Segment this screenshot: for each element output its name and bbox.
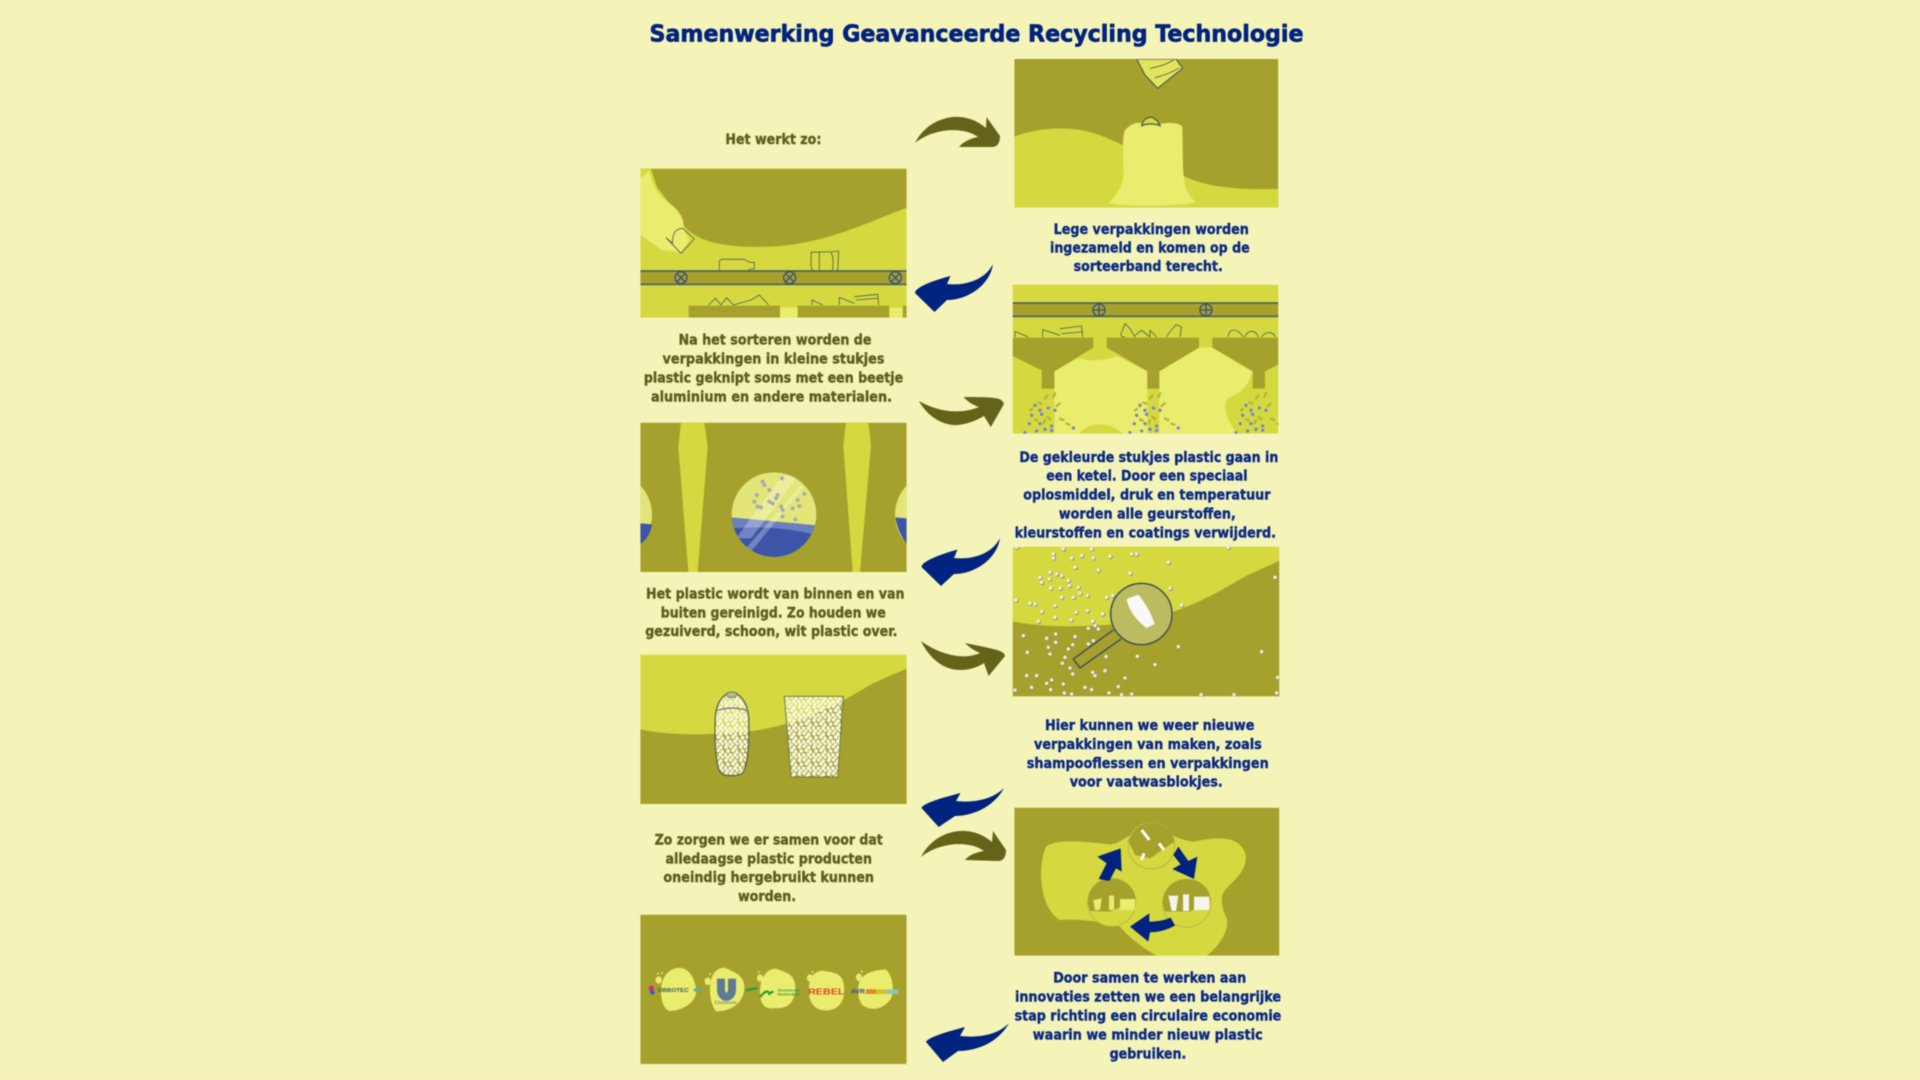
wheels bbox=[1093, 304, 1212, 316]
arrow: navy 2 bbox=[922, 538, 1000, 586]
text: step 4: Het plastic wordt van binnen en van bbox=[646, 586, 904, 602]
text: step 1: Lege verpakkingen worden bbox=[1054, 222, 1249, 238]
text: step 5: voor vaatwasblokjes. bbox=[1070, 775, 1223, 791]
light background shapes bbox=[1054, 348, 1253, 434]
text: step 5: verpakkingen van maken, zoals bbox=[1034, 737, 1262, 753]
bag bbox=[811, 251, 839, 271]
arrow: navy 4 bbox=[926, 1023, 1009, 1062]
magnifier lens bbox=[1111, 583, 1172, 645]
text: step 3: kleurstoffen en coatings verwijderd. bbox=[1015, 525, 1276, 541]
text: step 7: gebruiken. bbox=[1110, 1047, 1186, 1063]
panel: sorting belt bbox=[640, 168, 907, 318]
package bag bbox=[784, 696, 843, 777]
panel: collecting sack bbox=[1014, 59, 1278, 208]
text: step 7: stap richting een circulaire economie bbox=[1015, 1009, 1281, 1025]
arrow: olive 4 bbox=[921, 831, 1006, 861]
logo: Unilever: Unilever bbox=[714, 1000, 737, 1006]
text: step 1: ingezameld en komen op de bbox=[1050, 241, 1250, 257]
logo: green partner bbox=[746, 987, 801, 997]
circle: flakes bbox=[1128, 822, 1175, 869]
intro label: Het werkt zo: bbox=[725, 132, 821, 148]
logo: AVR bbox=[851, 989, 898, 996]
magnified pellet bbox=[1127, 595, 1155, 628]
falling package bbox=[1137, 59, 1183, 88]
text: step 3: een ketel. Door een speciaal bbox=[1046, 469, 1248, 485]
arrow: left up bbox=[1097, 848, 1122, 881]
pellets bbox=[1015, 547, 1278, 695]
text: step 2 bbox=[644, 333, 903, 405]
title: Samenwerking Geavanceerde Recycling Technologie bbox=[650, 20, 1304, 48]
text: step 7 bbox=[1015, 971, 1281, 1063]
central vessel bbox=[729, 470, 819, 560]
logo: Obbotec bbox=[649, 986, 702, 995]
arrow: right down bbox=[1172, 847, 1197, 879]
magnifier handle bbox=[1073, 630, 1121, 668]
bottle label line bbox=[715, 708, 748, 711]
text: step 5: shampooflessen en verpakkingen bbox=[1027, 756, 1269, 772]
text: step 3: oplosmiddel, druk en temperatuur bbox=[1023, 488, 1271, 504]
logo: Obbotec: OBBOTEC bbox=[658, 988, 689, 994]
sack bbox=[1108, 123, 1196, 206]
circle: pellets bbox=[1088, 878, 1136, 926]
logo: green partner: Rotterdam bbox=[778, 992, 801, 997]
plastic flakes bbox=[1025, 393, 1284, 433]
arrow: navy 3 bbox=[922, 788, 1004, 827]
blob bbox=[1041, 828, 1246, 956]
text: step 2: plastic geknipt soms met een beetje bbox=[644, 371, 903, 387]
circle: products bbox=[1163, 879, 1211, 927]
text: step 2: Na het sorteren worden de bbox=[678, 333, 872, 349]
wheels bbox=[675, 272, 901, 284]
text: step 6 bbox=[655, 832, 883, 905]
logo: AVR: AVR bbox=[851, 990, 866, 996]
spikes bbox=[678, 423, 871, 572]
text: step 6: oneindig hergebruikt kunnen bbox=[663, 870, 874, 886]
arrow: olive 1 bbox=[915, 117, 1000, 147]
hoppers bbox=[1013, 338, 1278, 389]
text: step 5 bbox=[1027, 718, 1269, 791]
panel: new packaging bbox=[640, 655, 907, 804]
panel: recycling cycle bbox=[1014, 808, 1279, 956]
bottle on sack bbox=[1142, 117, 1160, 126]
conveyor belt bbox=[640, 271, 907, 284]
panel: shredding bbox=[1013, 285, 1284, 434]
text: step 4: gezuiverd, schoon, wit plastic over. bbox=[645, 624, 898, 640]
text: step 7: waarin we minder nieuw plastic bbox=[1033, 1028, 1263, 1044]
text: step 1 bbox=[1050, 222, 1250, 275]
arrow: bottom left bbox=[1130, 913, 1175, 942]
panel: partners bbox=[640, 915, 907, 1064]
logo: green partner: Gemeente bbox=[778, 987, 801, 992]
flakes bbox=[754, 478, 804, 519]
text: step 3 bbox=[1015, 450, 1278, 541]
logo: Unilever bbox=[714, 979, 737, 1006]
conveyor belt bbox=[1013, 303, 1278, 317]
side vessels bbox=[640, 486, 908, 544]
shampoo bottle bbox=[715, 692, 749, 776]
text: step 1: sorteerband terecht. bbox=[1074, 259, 1223, 275]
text: step 5: Hier kunnen we weer nieuwe bbox=[1045, 718, 1254, 734]
text: step 6: Zo zorgen we er samen voor dat bbox=[655, 832, 883, 848]
chute bbox=[640, 171, 689, 252]
bottle bbox=[719, 259, 754, 271]
arrow: olive 2 bbox=[919, 397, 1004, 427]
bins bbox=[689, 306, 907, 318]
package on chute bbox=[666, 228, 694, 253]
arrow: navy 1 bbox=[915, 264, 993, 312]
arrow: olive 3 bbox=[921, 641, 1005, 676]
text: step 6: alledaagse plastic producten bbox=[666, 851, 872, 867]
text: step 7: Door samen te werken aan bbox=[1053, 971, 1246, 987]
logo: Rebel: REBEL bbox=[808, 987, 845, 997]
bottom bump bbox=[1078, 424, 1123, 434]
text: step 6: worden. bbox=[738, 889, 796, 905]
plastic items bbox=[1015, 324, 1276, 337]
shredded pieces bbox=[709, 294, 879, 305]
text: step 3: De gekleurde stukjes plastic gaan in bbox=[1019, 450, 1278, 466]
text: step 2: verpakkingen in kleine stukjes bbox=[662, 352, 884, 368]
text: step 4 bbox=[645, 586, 904, 640]
text: step 2: aluminium en andere materialen. bbox=[651, 389, 892, 405]
bottle cap bbox=[727, 692, 737, 697]
text: step 3: worden alle geurstoffen, bbox=[1059, 507, 1236, 523]
panel: magnifier bbox=[1013, 547, 1279, 696]
text: step 7: innovaties zetten we een belangrijke bbox=[1015, 990, 1281, 1006]
blobs bbox=[657, 968, 893, 1011]
panel: kettle bbox=[640, 422, 908, 573]
text: step 4: buiten gereinigd. Zo houden we bbox=[661, 605, 886, 621]
